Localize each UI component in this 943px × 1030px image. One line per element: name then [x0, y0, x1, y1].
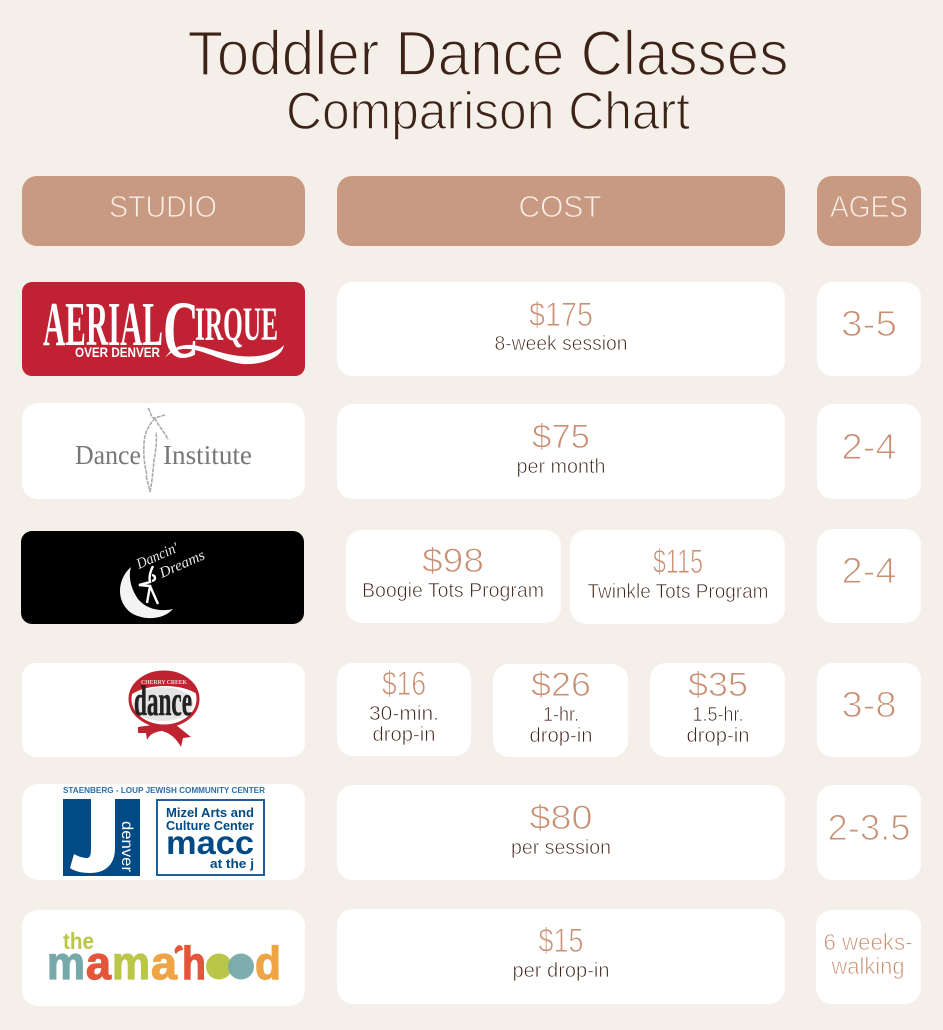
cost card: $15: $15: [538, 922, 584, 960]
studio logo: JCC Denver / MACC at the J: Mizel Arts and: [166, 805, 254, 820]
studio logo: JCC Denver / MACC at the J: at the j: [210, 856, 254, 871]
studio logo: Aerial Cirque over Denver: C: [163, 284, 199, 375]
cost card: $98 Boogie Tots Program: [346, 530, 561, 623]
ages card: 6 weeks-walking: walking: [831, 953, 904, 979]
cost card: $35 1.5-hr. drop-in: 1.5-hr.: [692, 703, 744, 726]
ages card: 2-3.5: 2-3.5: [828, 807, 910, 848]
cost card: $35 1.5-hr. drop-in: drop-in: [686, 724, 750, 747]
studio logo: JCC Denver / MACC at the J: STAENBERG - LOUP JEWISH COMMUNITY CENTER: [63, 786, 265, 795]
cost card: $115 Twinkle Tots Program: $115: [653, 543, 703, 581]
header: studio: [22, 176, 305, 246]
header: ages: [817, 176, 921, 246]
cost card: $15: [337, 909, 785, 1004]
ages card: 6 weeks-walking: [816, 910, 921, 1004]
studio logo: Dance Institute: [22, 403, 305, 499]
ages card: 2-4: [817, 404, 921, 499]
ages card: 2-4: [817, 529, 921, 623]
header: ages: AGES: [830, 189, 908, 224]
cost card: $75: $75: [532, 418, 590, 456]
studio logo: JCC Denver / MACC at the J: Culture Center: [166, 818, 254, 833]
cost card: $175: [337, 282, 785, 376]
ages card: 6 weeks-walking: 6 weeks-: [824, 929, 912, 955]
studio logo: the mama'hood: a: [86, 937, 111, 989]
ages card: 3-8: 3-8: [842, 684, 896, 725]
cost card: $16 30-min. drop-in: [337, 663, 471, 756]
ages card: 3-8: [817, 663, 921, 757]
studio logo: JCC Denver / MACC at the J: macc: [166, 824, 254, 861]
studio logo: Dancin' Dreams: [21, 531, 304, 624]
cost card: $15: per drop-in: [512, 959, 610, 982]
ages card: 2-3.5: [817, 785, 921, 880]
ages card: 3-5: [817, 282, 921, 376]
title: Toddler Dance Classes: [188, 19, 788, 89]
cost card: $175: $175: [529, 296, 593, 334]
studio logo: the mama'hood: m: [47, 937, 85, 989]
studio logo: the mama'hood: h: [182, 937, 206, 989]
studio logo: Aerial Cirque over Denver: AERIAL: [43, 291, 163, 359]
header: cost: COST: [518, 189, 602, 224]
header: studio: STUDIO: [109, 189, 217, 224]
cost card: $26 1-hr. drop-in: $26: [531, 666, 591, 704]
ages card: 3-5: 3-5: [841, 303, 897, 344]
studio logo: Aerial Cirque over Denver: [22, 282, 305, 376]
studio logo: JCC Denver / MACC at the J: denver: [118, 821, 135, 873]
studio logo: the mama'hood: [22, 910, 305, 1006]
cost card: $35 1.5-hr. drop-in: $35: [688, 666, 748, 704]
studio logo: the mama'hood: the: [63, 928, 94, 954]
cost card: $115 Twinkle Tots Program: [570, 530, 785, 624]
title: [188, 19, 788, 141]
cost card: $98 Boogie Tots Program: Boogie Tots Program: [362, 579, 544, 602]
ages card: 2-4: 2-4: [842, 426, 896, 467]
cost card: $35 1.5-hr. drop-in: [650, 663, 785, 757]
studio logo: Dance Institute: Institute: [163, 440, 252, 470]
studio logo: Cherry Creek Dance: CHERRY CREEK: [141, 679, 187, 686]
cost card: $80: per session: [511, 836, 611, 859]
studio logo: the mama'hood: m: [112, 937, 150, 989]
cost card: $75: [337, 404, 785, 499]
header: cost: [337, 176, 785, 246]
studio logo: the mama'hood: a: [151, 937, 177, 989]
cost card: $16 30-min. drop-in: 30-min.: [369, 702, 439, 725]
cost card: $98 Boogie Tots Program: $98: [422, 542, 484, 580]
title: Comparison Chart: [286, 82, 690, 141]
studio logo: the mama'hood: d: [255, 937, 281, 989]
cost card: $80: $80: [530, 799, 592, 837]
studio logo: Aerial Cirque over Denver: IRQUE: [195, 298, 278, 351]
cost card: $26 1-hr. drop-in: 1-hr.: [543, 703, 579, 726]
studio logo: Dance Institute: Dance: [75, 440, 141, 470]
studio logo: Cherry Creek Dance: dance: [134, 679, 192, 725]
studio logo: Dancin' Dreams: Dreams: [156, 547, 208, 582]
cost card: $26 1-hr. drop-in: drop-in: [530, 724, 592, 747]
cost card: $26 1-hr. drop-in: [493, 664, 628, 757]
studio logo: JCC Denver / MACC at the J: [22, 784, 305, 880]
cost card: $16 30-min. drop-in: $16: [382, 665, 426, 703]
ages card: 2-4: 2-4: [842, 550, 896, 591]
cost card: $80: [337, 785, 785, 880]
cost card: $16 30-min. drop-in: drop-in: [372, 723, 436, 746]
studio logo: Aerial Cirque over Denver: OVER DENVER: [75, 344, 160, 360]
cost card: $175: 8-week session: [494, 332, 628, 355]
studio logo: Cherry Creek Dance: [22, 663, 305, 757]
cost card: $75: per month: [516, 455, 606, 478]
cost card: $115 Twinkle Tots Program: Twinkle Tots Program: [588, 580, 768, 603]
studio logo: Dancin' Dreams: Dancin': [133, 540, 181, 573]
